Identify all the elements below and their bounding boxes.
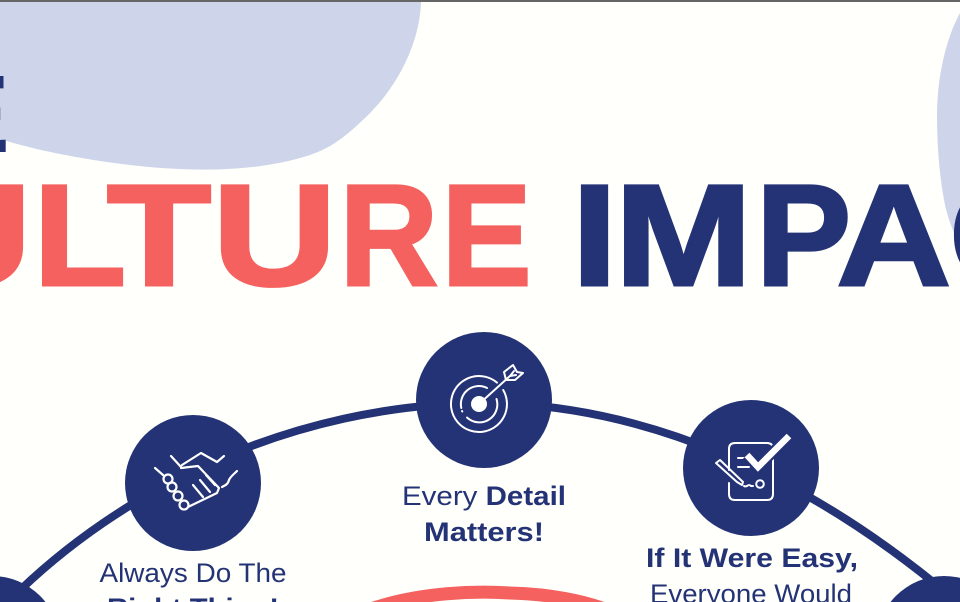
red central shape — [365, 592, 610, 602]
title word: IMPACT: A — [836, 156, 951, 316]
title word: CULTURE: T — [107, 156, 211, 316]
label: Every Detail Matters: Matters! — [424, 517, 544, 547]
title word: IMPACT — [572, 155, 960, 316]
label: Every Detail Matters: Every Detail — [402, 481, 566, 511]
node: far right — [876, 576, 960, 602]
label: Always Do The Right Thing: Always Do The — [100, 558, 286, 588]
label: Every Detail Matters — [402, 481, 566, 547]
label: If It Were Easy: If It Were Easy, — [646, 543, 858, 573]
title word: IMPACT: M — [615, 155, 752, 316]
title word: IMPACT: I — [572, 155, 617, 316]
icon: target and arrow — [451, 365, 523, 432]
title: CULTURE IMPACT — [0, 154, 960, 316]
node: handshake — [125, 415, 261, 551]
label: Always Do The Right Thing — [100, 558, 286, 602]
title word: CULTURE — [0, 154, 531, 316]
node: target — [416, 332, 552, 468]
title word: CULTURE: R — [340, 155, 438, 316]
node: checklist — [683, 400, 819, 536]
icon: document with check and pen — [716, 436, 789, 500]
connecting arc — [10, 403, 950, 600]
decorative blob: top left — [0, 2, 421, 170]
title word: CULTURE: U — [212, 154, 337, 316]
label: If It Were Easy — [646, 543, 858, 602]
decorative blob: top right — [937, 13, 960, 245]
title word: IMPACT: P — [756, 155, 851, 316]
title word: CULTURE: L — [33, 156, 126, 316]
title word: CULTURE: E — [442, 155, 531, 316]
node: far left — [0, 576, 60, 602]
icon: handshake — [155, 453, 237, 510]
